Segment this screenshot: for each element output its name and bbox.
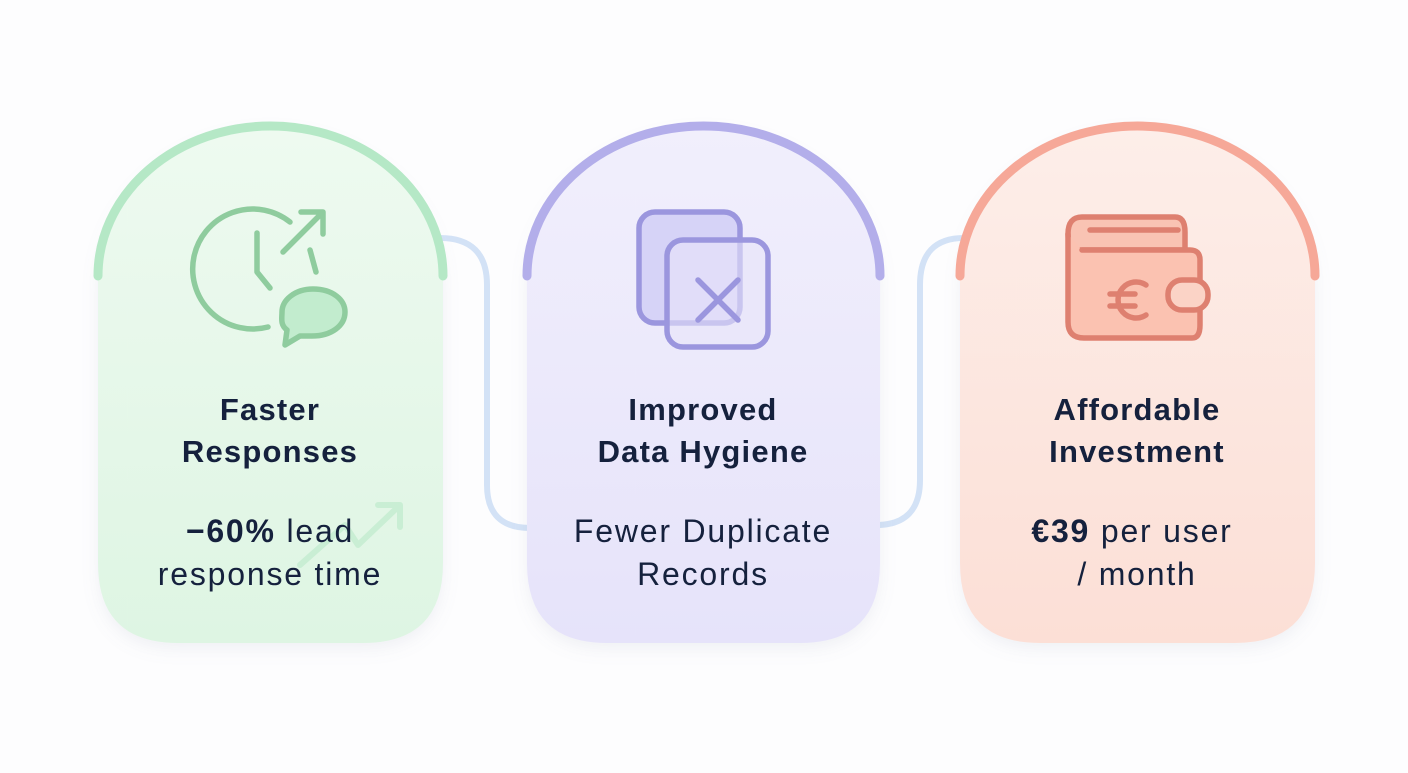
panel: improved data hygiene [527, 126, 880, 643]
panel: faster responses [98, 126, 443, 643]
panel: faster responses: Responses [182, 434, 358, 469]
stat text: Fewer Duplicate [574, 513, 832, 549]
panel: faster responses: response time [158, 556, 382, 592]
panel: improved data hygiene: Data Hygiene [598, 434, 808, 469]
icon: faint trend arrow [300, 505, 400, 565]
stat text: −60% lead [186, 513, 354, 549]
stat text: €39 per user [1031, 513, 1233, 549]
heading: Faster [220, 392, 320, 427]
panel: improved data hygiene: Records [637, 556, 769, 592]
panel: affordable investment [960, 126, 1315, 643]
heading: Affordable [1054, 392, 1220, 427]
heading: Improved [628, 392, 778, 427]
panel: affordable investment: / month [1077, 556, 1197, 592]
connector: purple to red [876, 238, 964, 525]
icon: duplicate records with x [639, 212, 768, 347]
icon: wallet with euro [1068, 217, 1208, 338]
panel: affordable investment: Investment [1049, 434, 1225, 469]
connector: green to purple [440, 238, 530, 528]
icon: clock with speech bubble [193, 209, 345, 345]
